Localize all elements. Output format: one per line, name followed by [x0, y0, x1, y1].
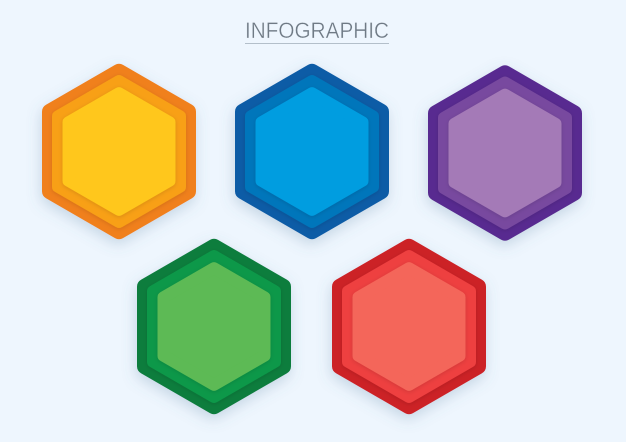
title: INFOGRAPHIC [245, 18, 389, 43]
hexagon: blue [243, 72, 381, 231]
hexagon: orange and yellow [50, 72, 188, 231]
hexagon: green [145, 247, 283, 406]
hexagon: red [340, 247, 478, 406]
hexagon: purple [436, 73, 574, 233]
